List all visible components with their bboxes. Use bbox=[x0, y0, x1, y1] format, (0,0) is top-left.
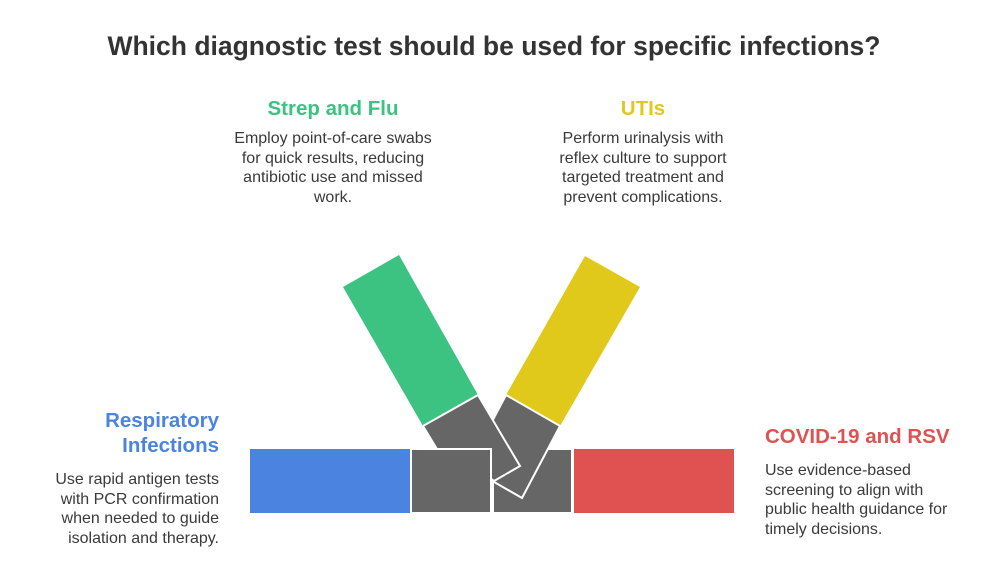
block: strep and flu: Employ point-of-care swabs for quick results, reducing antibiotic use and missed work. bbox=[234, 130, 432, 206]
block: strep and flu bbox=[234, 97, 432, 206]
block: respiratory infections: Respiratory Infections bbox=[105, 409, 219, 457]
block: respiratory infections: Use rapid antigen tests with PCR confirmation when needed to guide isolation and therapy. bbox=[55, 471, 219, 546]
block: covid-19 and rsv: Use evidence-based screening to align with public health guidance for timely decisions. bbox=[765, 462, 947, 538]
block: utis: Perform urinalysis with reflex culture to support targeted treatment and prevent complications. bbox=[559, 130, 727, 206]
block: respiratory infections bbox=[55, 409, 219, 546]
arm: yellow bbox=[468, 256, 640, 498]
gray: right square bbox=[493, 449, 572, 513]
bar: red bbox=[574, 449, 734, 513]
gray: left square bbox=[411, 449, 491, 513]
title: Which diagnostic test should be used for specific infections? bbox=[107, 31, 880, 61]
block: covid-19 and rsv bbox=[765, 425, 950, 538]
block: utis: UTIs bbox=[621, 97, 665, 120]
arm: green bbox=[343, 255, 520, 497]
block: covid-19 and rsv: COVID-19 and RSV bbox=[765, 425, 950, 448]
block: utis bbox=[559, 97, 727, 206]
bar: blue bbox=[250, 449, 410, 513]
block: strep and flu: Strep and Flu bbox=[268, 97, 398, 120]
